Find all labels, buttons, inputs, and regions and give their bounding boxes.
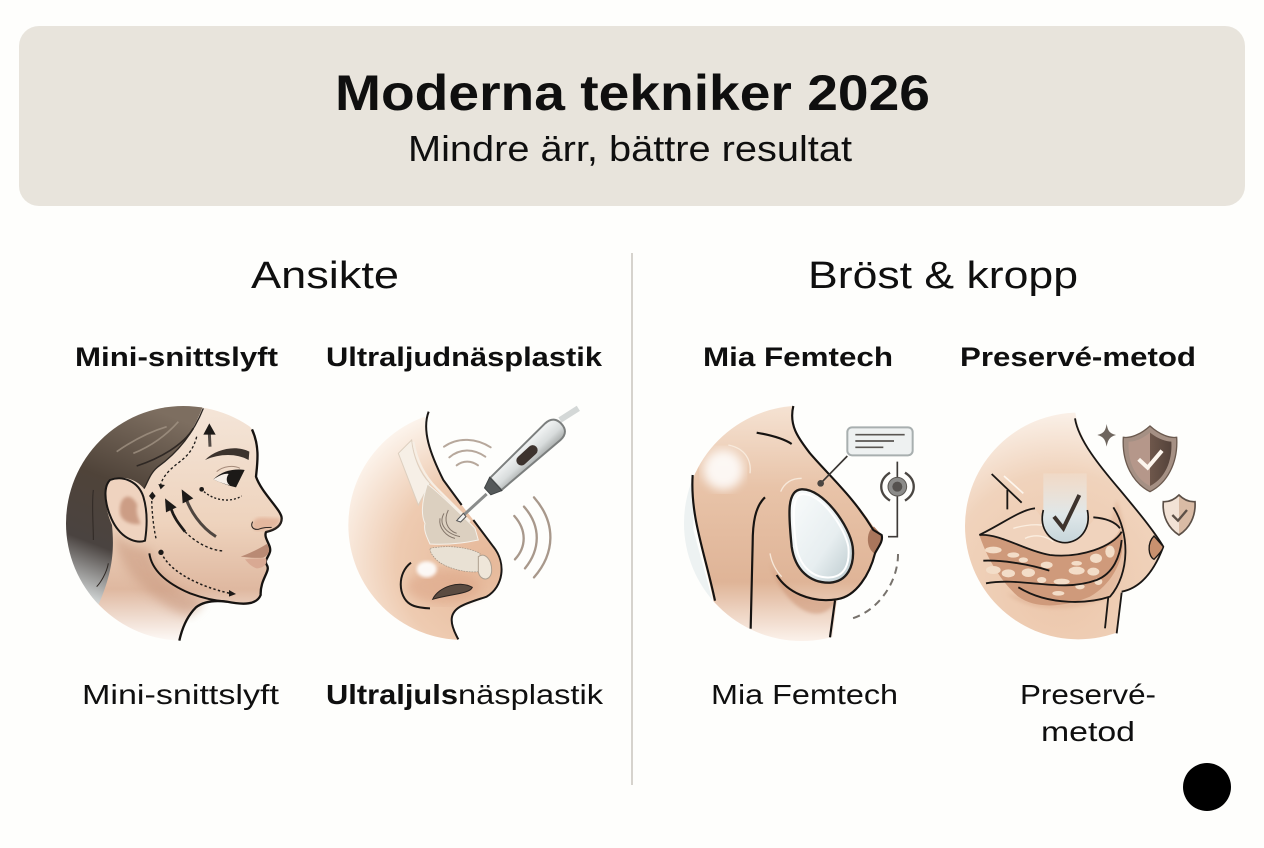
illustration: Mia Femtech implant (684, 406, 915, 641)
dashed incision arc (852, 554, 898, 619)
column heading: Mia Femtech: Mia Femtech (703, 342, 893, 372)
shoulder highlights (728, 445, 802, 577)
lift arrows (149, 423, 242, 597)
section heading: Ansikte: Ansikte (251, 255, 399, 297)
implant with check (1042, 473, 1088, 543)
torso skin (684, 406, 874, 641)
callout connector (821, 456, 847, 483)
tissue layers (979, 508, 1123, 605)
small shield (1163, 495, 1195, 535)
cartilage (422, 484, 492, 579)
nasal bone (398, 440, 430, 505)
column heading: Ultraljudnäsplastik: Ultraljudnäsplastik (326, 342, 603, 372)
black dot (1183, 763, 1231, 811)
illustration: face with lift vectors (66, 406, 283, 641)
caption: Mini-snittslyft: Mini-snittslyft (82, 679, 279, 710)
nipple (868, 527, 882, 553)
column heading: Mini-snittslyft: Mini-snittslyft (75, 342, 278, 372)
caption: Ultraljulsnäsplastik: Ultraljuls (326, 679, 458, 710)
subtitle: Mindre ärr, bättre resultat (408, 128, 852, 169)
caption: Preservé-metod: metod (1041, 716, 1135, 747)
header banner (19, 26, 1245, 206)
ear (105, 478, 147, 542)
facial profile line (179, 429, 282, 641)
title: Moderna tekniker 2026 (335, 65, 930, 121)
nose profile lines (401, 412, 502, 639)
nose and lips (241, 517, 280, 568)
column heading: Preservé-metod: Preservé-metod (960, 342, 1196, 372)
body contour lines (692, 406, 882, 637)
implant (789, 489, 853, 583)
nipple (1149, 536, 1163, 559)
caption: Preservé-metod: Preservé- (1020, 679, 1156, 710)
illustration: Preservé method (950, 410, 1195, 640)
caption: Preservé-metod (1020, 679, 1156, 747)
breast skin (965, 412, 1159, 640)
nose tip highlight and nostril (417, 561, 472, 599)
illustration: ultrasound rhinoplasty (330, 408, 578, 642)
sound waves (444, 440, 550, 577)
nose skin (348, 416, 501, 640)
sensor icon (881, 462, 914, 537)
eyebrow (205, 448, 249, 460)
ultrasound probe (457, 408, 578, 522)
jawline (149, 553, 227, 602)
caption: Mia Femtech: Mia Femtech (711, 679, 898, 710)
hairline stroke (144, 408, 203, 489)
caption: Ultraljulsnäsplastik: näsplastik (458, 679, 604, 710)
data callout box (847, 427, 913, 455)
anatomical contour lines (979, 418, 1163, 633)
sensor dot (817, 480, 824, 487)
eye (213, 466, 245, 487)
cartilage resonance arcs (440, 510, 460, 538)
caption: Ultraljulsnäsplastik (326, 679, 604, 710)
large shield (1123, 426, 1177, 492)
centre divider (631, 253, 633, 785)
sparkle (1097, 424, 1116, 447)
section heading: Bröst & kropp: Bröst & kropp (808, 255, 1078, 297)
